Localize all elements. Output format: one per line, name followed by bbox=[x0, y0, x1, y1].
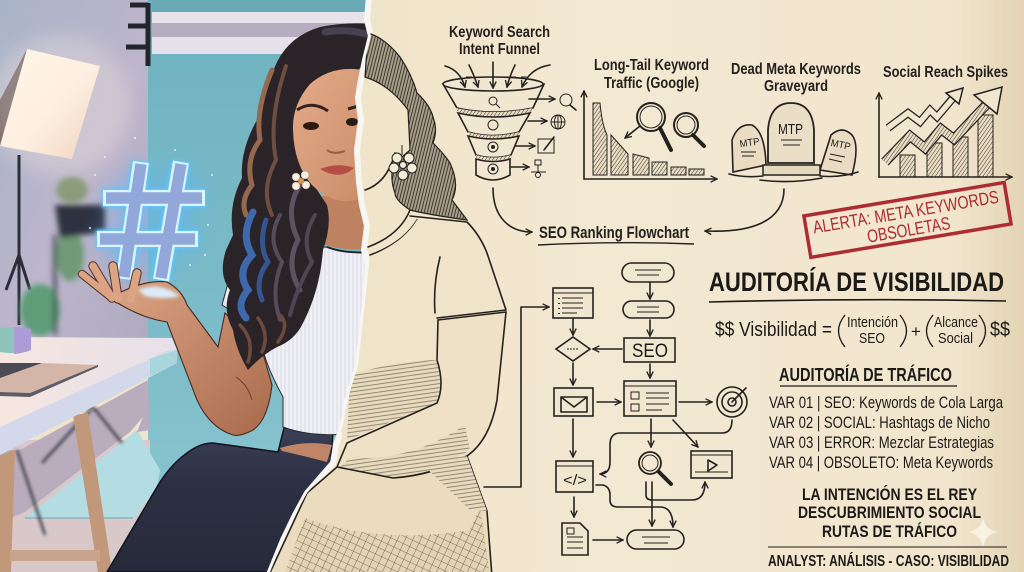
white ribbed shirt bbox=[222, 247, 372, 435]
neon hashtag icon bbox=[89, 137, 213, 280]
stamp: meta keywords alert bbox=[804, 182, 1011, 257]
rising zig-zag arrows bbox=[885, 87, 1002, 162]
sketch lap and leg bbox=[268, 456, 492, 572]
end pill bbox=[627, 530, 684, 549]
chart: long-tail keyword traffic bbox=[584, 57, 717, 179]
panel: visibility audit bbox=[709, 266, 1010, 570]
document icon bbox=[562, 523, 588, 555]
visibility formula: $$ Visibilidad = bbox=[715, 319, 832, 341]
flowchart: seo ranking bbox=[484, 263, 747, 555]
start pills bbox=[622, 263, 674, 318]
sketch cross-hatching bbox=[283, 505, 490, 572]
variables list bbox=[769, 394, 1004, 472]
sketch flower earring bbox=[389, 145, 417, 180]
incoming arrows bbox=[445, 62, 550, 88]
envelope window bbox=[554, 388, 593, 416]
connector from funnel bbox=[493, 188, 532, 232]
chart axes bbox=[583, 91, 585, 179]
search icon bbox=[639, 452, 671, 484]
visibility formula: SEO bbox=[859, 330, 885, 347]
background plant and lamp bbox=[20, 177, 105, 336]
flower earring bbox=[292, 171, 310, 190]
code window: </> bbox=[563, 472, 587, 489]
side tombstones: MTP bbox=[739, 137, 761, 150]
code diamond bbox=[556, 337, 590, 361]
traffic audit heading: AUDITORÍA DE TRÁFICO bbox=[779, 364, 952, 385]
panel: photorealistic studio scene bbox=[0, 0, 382, 572]
studio wall bbox=[0, 0, 152, 345]
target icon bbox=[717, 387, 747, 417]
sketch hair bbox=[365, 33, 467, 220]
magnifying glasses bbox=[625, 103, 704, 150]
list window bbox=[553, 288, 593, 318]
heading: seo ranking flowchart with connectors bbox=[493, 188, 784, 245]
face bbox=[293, 69, 372, 201]
teal backdrop bbox=[148, 0, 382, 572]
hair highlights bbox=[240, 31, 372, 362]
woman: realistic half bbox=[82, 23, 372, 572]
seo box: SEO bbox=[632, 341, 668, 362]
funnel title: Keyword Search bbox=[449, 24, 550, 41]
visibility formula: Intención bbox=[847, 314, 898, 331]
seo box bbox=[624, 338, 675, 362]
key messages: DESCUBRIMIENTO SOCIAL bbox=[798, 503, 981, 522]
neck bbox=[322, 196, 368, 250]
hand on knee bbox=[280, 443, 332, 462]
chart title bbox=[594, 57, 709, 92]
chart title: Long-Tail Keyword bbox=[594, 57, 709, 74]
burial mound bbox=[729, 172, 858, 182]
stamp: meta keywords alert: OBSOLETAS bbox=[866, 213, 952, 247]
visibility formula: + bbox=[911, 322, 921, 341]
key messages: LA INTENCIÓN ES EL REY bbox=[802, 485, 978, 504]
funnel diagram: keyword search intent bbox=[443, 24, 576, 180]
sketch jaw and collar bbox=[365, 153, 417, 255]
sketch t-shirt bbox=[340, 220, 418, 435]
funnel title: Intent Funnel bbox=[459, 41, 540, 58]
code window bbox=[556, 461, 593, 492]
funnel title bbox=[449, 24, 550, 58]
collar bbox=[327, 247, 372, 252]
raised arm and hand bbox=[82, 266, 272, 435]
graveyard title: Dead Meta Keywords bbox=[731, 61, 861, 78]
sparkle bbox=[968, 517, 998, 548]
layout window bbox=[624, 381, 676, 416]
key messages bbox=[798, 485, 981, 541]
spike bars bbox=[900, 115, 993, 177]
flow arrows bbox=[484, 283, 732, 540]
key messages: RUTAS DE TRÁFICO bbox=[822, 522, 957, 541]
visibility formula: Social bbox=[938, 330, 973, 347]
long-tail bars bbox=[593, 103, 704, 175]
spike axes bbox=[878, 93, 880, 177]
funnel output arrows and icons bbox=[510, 94, 576, 178]
facial features bbox=[297, 105, 362, 175]
flowchart heading: SEO Ranking Flowchart bbox=[539, 224, 689, 242]
visibility formula: Alcance bbox=[934, 314, 978, 331]
long wavy dark hair bbox=[223, 23, 372, 370]
laptop bbox=[0, 363, 98, 397]
pants bbox=[107, 428, 333, 572]
connector from graveyard bbox=[705, 189, 784, 231]
backdrop roll stripes bbox=[152, 0, 382, 54]
panel: torn paper sketch background bbox=[268, 0, 1024, 572]
under-desk wall and floor bbox=[0, 380, 160, 572]
illustration: dead meta keywords graveyard bbox=[729, 61, 861, 182]
desk bbox=[0, 327, 177, 572]
woman: pencil sketch half bbox=[268, 33, 506, 572]
softbox light bbox=[0, 35, 130, 325]
side tombstones bbox=[732, 125, 856, 175]
chart title: Traffic (Google) bbox=[604, 75, 699, 92]
side tombstones: MTP bbox=[830, 138, 852, 153]
sketch arm bbox=[337, 312, 506, 478]
main tombstone: MTP bbox=[778, 121, 803, 138]
sketch shirt shading bbox=[347, 360, 441, 440]
visibility formula: $$ bbox=[990, 319, 1010, 341]
funnel tiers bbox=[443, 77, 544, 180]
graveyard title bbox=[731, 61, 861, 95]
graveyard title: Graveyard bbox=[764, 78, 828, 95]
backdrop mount bracket bbox=[126, 3, 148, 66]
chart: social reach spikes bbox=[879, 64, 1012, 177]
visibility formula bbox=[715, 314, 1010, 347]
video window bbox=[691, 451, 732, 478]
